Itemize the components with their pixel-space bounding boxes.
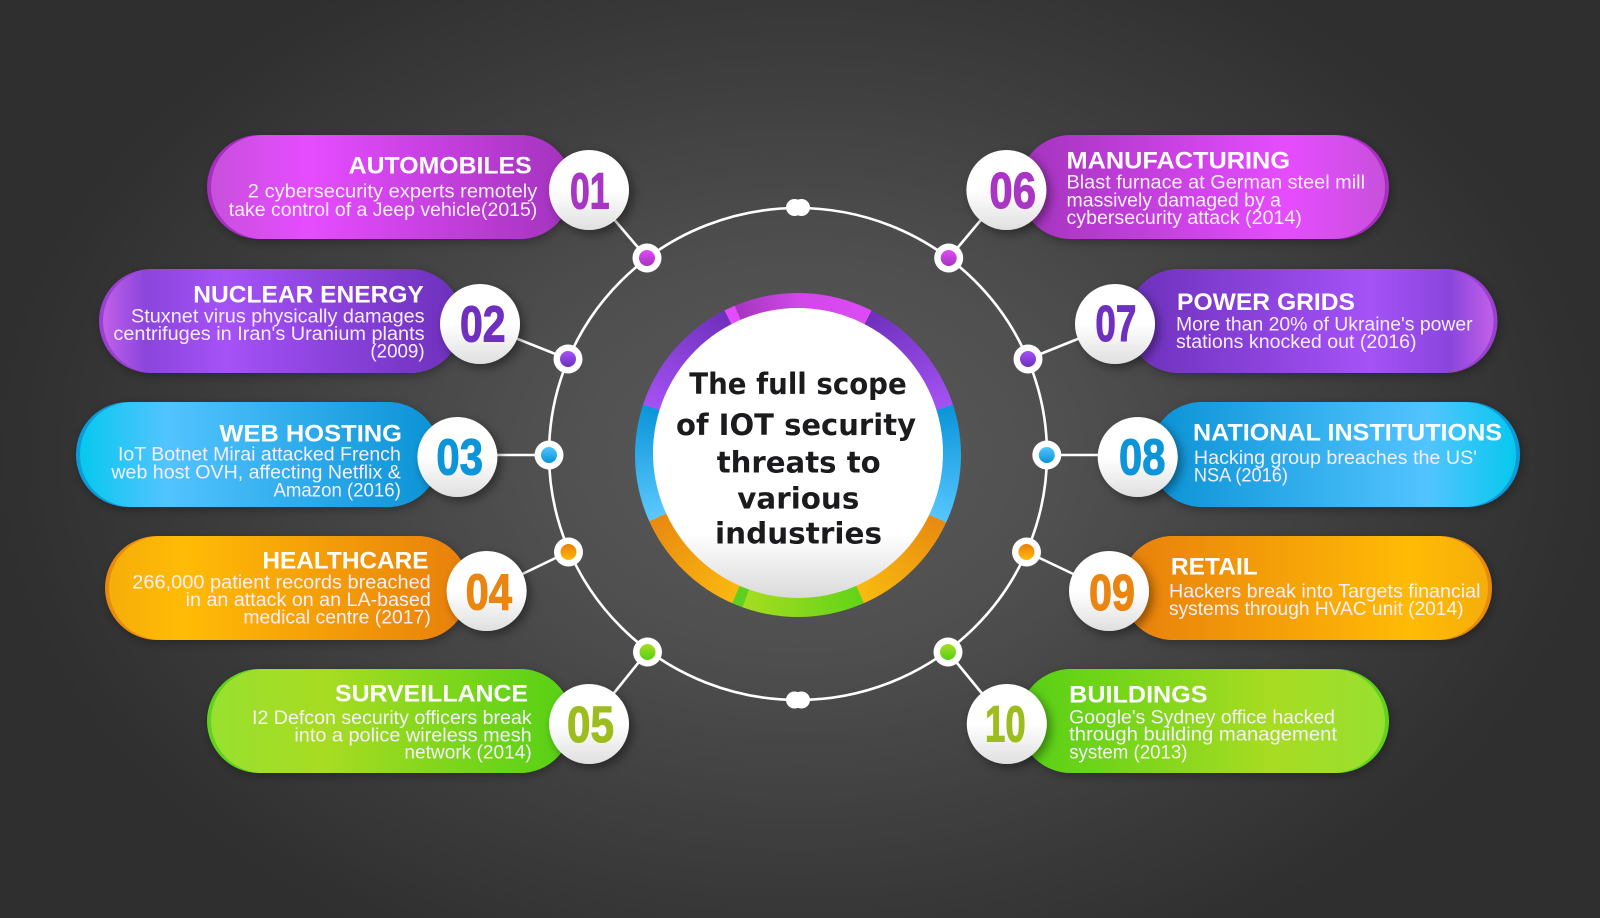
number badge 08: 08 bbox=[1119, 428, 1165, 486]
description 05: into a police wireless mesh bbox=[294, 726, 532, 747]
title: various bbox=[737, 481, 859, 515]
description 03: web host OVH, affecting Netflix & bbox=[110, 463, 401, 484]
description 07 bbox=[1176, 315, 1473, 353]
description 03: IoT Botnet Mirai attacked French bbox=[118, 445, 401, 466]
number badge 06: 06 bbox=[989, 162, 1036, 219]
description 09: systems through HVAC unit (2014) bbox=[1169, 599, 1464, 620]
description 01 bbox=[229, 182, 538, 221]
description 05: network (2014) bbox=[404, 743, 532, 764]
description 01: take control of a Jeep vehicle(2015) bbox=[229, 200, 537, 221]
description 08: Hacking group breaches the US' bbox=[1194, 448, 1477, 469]
description 08 bbox=[1194, 448, 1477, 486]
big ring line bbox=[549, 208, 1047, 700]
panel 08: national institutions bbox=[1150, 402, 1520, 507]
description 08: NSA (2016) bbox=[1194, 465, 1288, 486]
number badge 01: 01 bbox=[570, 162, 610, 220]
ring node 08 bbox=[1032, 440, 1061, 470]
description 02: centrifuges in Iran's Uranium plants bbox=[113, 324, 425, 345]
connector lines bbox=[457, 190, 1138, 724]
heading 04: HEALTHCARE bbox=[262, 547, 428, 574]
description 04 bbox=[132, 572, 431, 628]
description 04: in an attack on an LA-based bbox=[186, 590, 431, 611]
center ring: colored segments bbox=[635, 293, 961, 617]
heading 06: MANUFACTURING bbox=[1066, 147, 1290, 174]
number badge 05 bbox=[549, 684, 629, 764]
description 06: Blast furnace at German steel mill bbox=[1066, 173, 1365, 194]
heading 05: SURVEILLANCE bbox=[335, 681, 528, 708]
number badge 06 bbox=[966, 150, 1046, 230]
description 10: system (2013) bbox=[1069, 743, 1188, 764]
description 06: massively damaged by a bbox=[1066, 191, 1281, 212]
description 09 bbox=[1169, 581, 1480, 620]
number badge 07 bbox=[1075, 284, 1155, 364]
heading 09: RETAIL bbox=[1171, 554, 1258, 581]
description 05 bbox=[252, 708, 532, 764]
bottom connector bbox=[786, 692, 810, 708]
ring node 06 bbox=[934, 244, 963, 272]
number badge 05: 05 bbox=[567, 696, 614, 753]
description 06 bbox=[1066, 173, 1365, 229]
description 02: (2009) bbox=[370, 342, 425, 363]
title: of IOT security bbox=[676, 408, 916, 442]
number badge 04: 04 bbox=[466, 564, 513, 621]
ring node 09 bbox=[1012, 538, 1041, 566]
number badge 02: 02 bbox=[460, 296, 506, 353]
panel 07: power grids bbox=[1127, 269, 1498, 373]
panel 09: retail bbox=[1121, 536, 1492, 640]
number badge 03: 03 bbox=[436, 428, 483, 486]
number badge 01 bbox=[549, 150, 629, 230]
heading 10: BUILDINGS bbox=[1069, 681, 1208, 708]
heading 08: NATIONAL INSTITUTIONS bbox=[1193, 420, 1502, 447]
description 10: through building management bbox=[1069, 725, 1338, 746]
ring node 10 bbox=[934, 638, 962, 666]
number badge 03 bbox=[417, 417, 497, 497]
description 02 bbox=[113, 307, 425, 363]
panel 10: buildings bbox=[1019, 669, 1389, 773]
top connector bbox=[786, 199, 810, 216]
description 05: I2 Defcon security officers break bbox=[252, 708, 532, 729]
description 09: Hackers break into Targets financial bbox=[1169, 581, 1480, 602]
description 03: Amazon (2016) bbox=[274, 481, 401, 502]
description 01: 2 cybersecurity experts remotely bbox=[248, 182, 538, 203]
description 04: medical centre (2017) bbox=[243, 607, 431, 628]
number badge 10 bbox=[967, 684, 1047, 764]
number badge 10: 10 bbox=[985, 696, 1026, 753]
heading 01: AUTOMOBILES bbox=[349, 152, 532, 179]
number badge 02 bbox=[440, 284, 520, 364]
number badge 04 bbox=[447, 551, 527, 631]
ring node 03 bbox=[534, 440, 564, 470]
number badge 07: 07 bbox=[1095, 295, 1136, 352]
heading 07: POWER GRIDS bbox=[1177, 289, 1355, 316]
description 06: cybersecurity attack (2014) bbox=[1066, 208, 1302, 229]
panel 03: web hosting bbox=[76, 402, 440, 507]
number badge 09 bbox=[1069, 551, 1149, 631]
panel 05: surveillance bbox=[207, 669, 572, 773]
heading 03: WEB HOSTING bbox=[219, 421, 402, 448]
description 10: Google's Sydney office hacked bbox=[1069, 707, 1335, 728]
ring node 02 bbox=[554, 344, 582, 374]
ring node 01 bbox=[632, 244, 662, 272]
description 07: stations knocked out (2016) bbox=[1176, 332, 1416, 353]
number badge 09: 09 bbox=[1089, 564, 1135, 621]
panel 01: automobiles bbox=[207, 135, 572, 239]
heading 02: NUCLEAR ENERGY bbox=[193, 281, 424, 308]
panel 04: healthcare bbox=[105, 536, 469, 640]
description 07: More than 20% of Ukraine's power bbox=[1176, 315, 1473, 336]
title: The full scope bbox=[689, 367, 907, 401]
title: industries bbox=[715, 516, 882, 550]
panel 06: manufacturing bbox=[1019, 135, 1389, 239]
ring node 07 bbox=[1014, 344, 1042, 374]
description 02: Stuxnet virus physically damages bbox=[131, 307, 425, 328]
title bbox=[676, 367, 916, 550]
panel 02: nuclear energy bbox=[99, 269, 462, 373]
ring node 05 bbox=[633, 638, 662, 666]
description 10 bbox=[1069, 707, 1338, 764]
number badge 08 bbox=[1098, 417, 1178, 497]
description 03 bbox=[110, 445, 401, 502]
center disc bbox=[653, 308, 943, 598]
title: threats to bbox=[717, 446, 881, 480]
description 04: 266,000 patient records breached bbox=[132, 572, 431, 593]
ring node 04 bbox=[554, 538, 583, 566]
